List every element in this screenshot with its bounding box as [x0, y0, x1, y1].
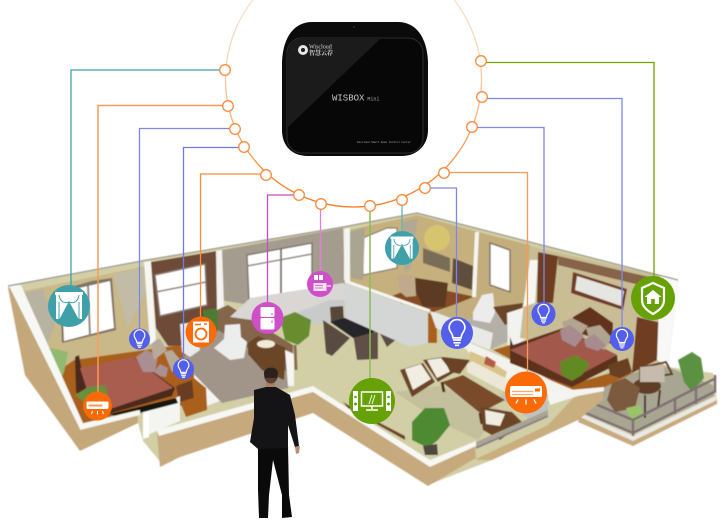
- white parapet: [580, 396, 716, 442]
- wallpaper wall: [217, 228, 345, 305]
- device glass: [287, 38, 423, 153]
- back wall: [520, 246, 678, 374]
- sofa: [467, 360, 510, 392]
- flowers: [350, 298, 370, 319]
- exterior brick walls: [8, 285, 476, 486]
- front wall white block: [143, 396, 180, 437]
- office: [344, 215, 478, 347]
- device glass highlight: [288, 39, 380, 127]
- bed: [510, 328, 618, 387]
- icon: curtain office: [385, 231, 419, 265]
- floor: [493, 345, 633, 400]
- connector: washer: [200, 174, 266, 318]
- plant: [412, 408, 450, 448]
- icon: washing machine: [186, 316, 216, 348]
- floor: [180, 328, 293, 403]
- icon: security shield: [631, 276, 675, 320]
- toilet: [214, 324, 247, 360]
- icon: bulb two: [173, 358, 194, 380]
- bed frame: [75, 355, 175, 414]
- brick edge: [578, 400, 717, 446]
- bed: [80, 357, 173, 409]
- side table: [608, 358, 632, 378]
- man standing: [250, 366, 300, 518]
- front rail and brick: [476, 387, 604, 460]
- plant: [678, 352, 704, 392]
- white column: [194, 368, 222, 406]
- top lattice: [558, 256, 662, 290]
- back wall: [20, 266, 210, 424]
- coffee table: [442, 375, 505, 413]
- dining set: [323, 298, 403, 360]
- back wall cap lines: [8, 213, 678, 286]
- hub device: [282, 22, 428, 156]
- night stand: [176, 380, 194, 406]
- lattice left: [537, 252, 558, 303]
- indoor palm: [280, 312, 311, 370]
- left bath: [151, 251, 294, 403]
- partition: [144, 261, 156, 345]
- balcony: [578, 352, 717, 446]
- floor plan illustration: [8, 213, 717, 486]
- counter front: [272, 300, 344, 325]
- white wall: [523, 260, 538, 307]
- front armchair: [480, 407, 523, 440]
- living room: [343, 341, 577, 455]
- painting: [571, 272, 627, 310]
- connector: bulb one: [140, 128, 235, 330]
- armchairs: [400, 363, 435, 397]
- connector: curtain left: [71, 70, 225, 286]
- icon: fridge: [252, 302, 284, 334]
- connector: television: [369, 206, 371, 379]
- chairs: [607, 378, 640, 412]
- device body: [282, 22, 428, 156]
- pillows: [136, 350, 158, 372]
- house footprint: [8, 213, 717, 485]
- icon: bulb right two: [610, 327, 634, 351]
- counter top: [230, 283, 355, 322]
- ring nodes: [220, 56, 487, 211]
- curtains: [348, 228, 365, 280]
- connector: bulb two: [184, 148, 244, 360]
- brick panel: [151, 251, 217, 346]
- bistro table: [633, 378, 661, 394]
- kitchen and dining: [216, 228, 355, 325]
- head: [264, 366, 278, 384]
- icon: curtain left: [48, 285, 90, 327]
- icon: kitchen appliance: [307, 271, 333, 297]
- connector: kitchen appliance: [320, 204, 322, 272]
- back wall: [436, 232, 530, 330]
- white right wall: [657, 274, 678, 367]
- right bedroom: [493, 246, 678, 400]
- hand: [295, 446, 300, 454]
- connector: curtain office: [401, 200, 403, 232]
- window: [363, 228, 397, 275]
- wall white edge: [216, 250, 224, 310]
- floor: [48, 345, 210, 424]
- icon: bulb right one: [532, 302, 556, 326]
- pillows: [562, 318, 588, 336]
- hub ring: [226, 0, 482, 207]
- white walls: [472, 232, 479, 297]
- icon: air conditioner left: [83, 392, 112, 420]
- logo: [298, 44, 333, 57]
- logo: Wiscloud: [309, 44, 332, 50]
- railing: [581, 378, 716, 433]
- vanity: [248, 336, 286, 380]
- connector: bulb right one: [472, 128, 544, 303]
- white back wall: [460, 341, 577, 402]
- floor: [462, 308, 510, 350]
- connector: bulb right two: [482, 98, 622, 328]
- rug: [395, 386, 502, 440]
- connector: air conditioner right: [444, 172, 528, 372]
- floor: [392, 285, 476, 313]
- desk: [410, 277, 448, 307]
- window: [60, 278, 116, 343]
- icon: television: [349, 378, 395, 424]
- trousers: [258, 446, 292, 518]
- lattice right: [632, 317, 662, 373]
- white partition: [345, 283, 428, 347]
- logo: 智慧云荐: [309, 49, 333, 57]
- toilet: [473, 293, 495, 323]
- device camera dot: [353, 26, 355, 28]
- plant: [38, 348, 68, 385]
- headboard: [570, 307, 613, 344]
- device caption: Wiscloud Smart Home Control Center: [357, 140, 411, 144]
- shelves: [423, 248, 450, 272]
- plant: [203, 308, 218, 340]
- floor: [578, 367, 714, 434]
- white wall caps: [9, 285, 83, 429]
- left bedroom: [20, 261, 222, 437]
- middle bath: [430, 232, 535, 350]
- connector: fridge: [268, 195, 299, 303]
- icon: bulb living room: [441, 317, 473, 349]
- tv stand: [343, 402, 405, 440]
- window: [155, 264, 207, 316]
- side table: [443, 357, 470, 374]
- light: [424, 225, 450, 251]
- connector: air conditioner left: [98, 106, 228, 392]
- neck: [266, 381, 275, 389]
- connector: security: [481, 62, 654, 276]
- icon: bulb one: [129, 328, 150, 350]
- icon: air conditioner right: [505, 372, 547, 414]
- device name: WISBOX Mini: [332, 94, 379, 104]
- back wall: [217, 305, 293, 375]
- jacket: [250, 387, 299, 449]
- curtains: [23, 289, 55, 370]
- window: [490, 243, 510, 292]
- plant: [560, 355, 590, 381]
- back wall: [345, 215, 478, 313]
- connector: bulb living room: [425, 188, 456, 318]
- window: [247, 243, 312, 301]
